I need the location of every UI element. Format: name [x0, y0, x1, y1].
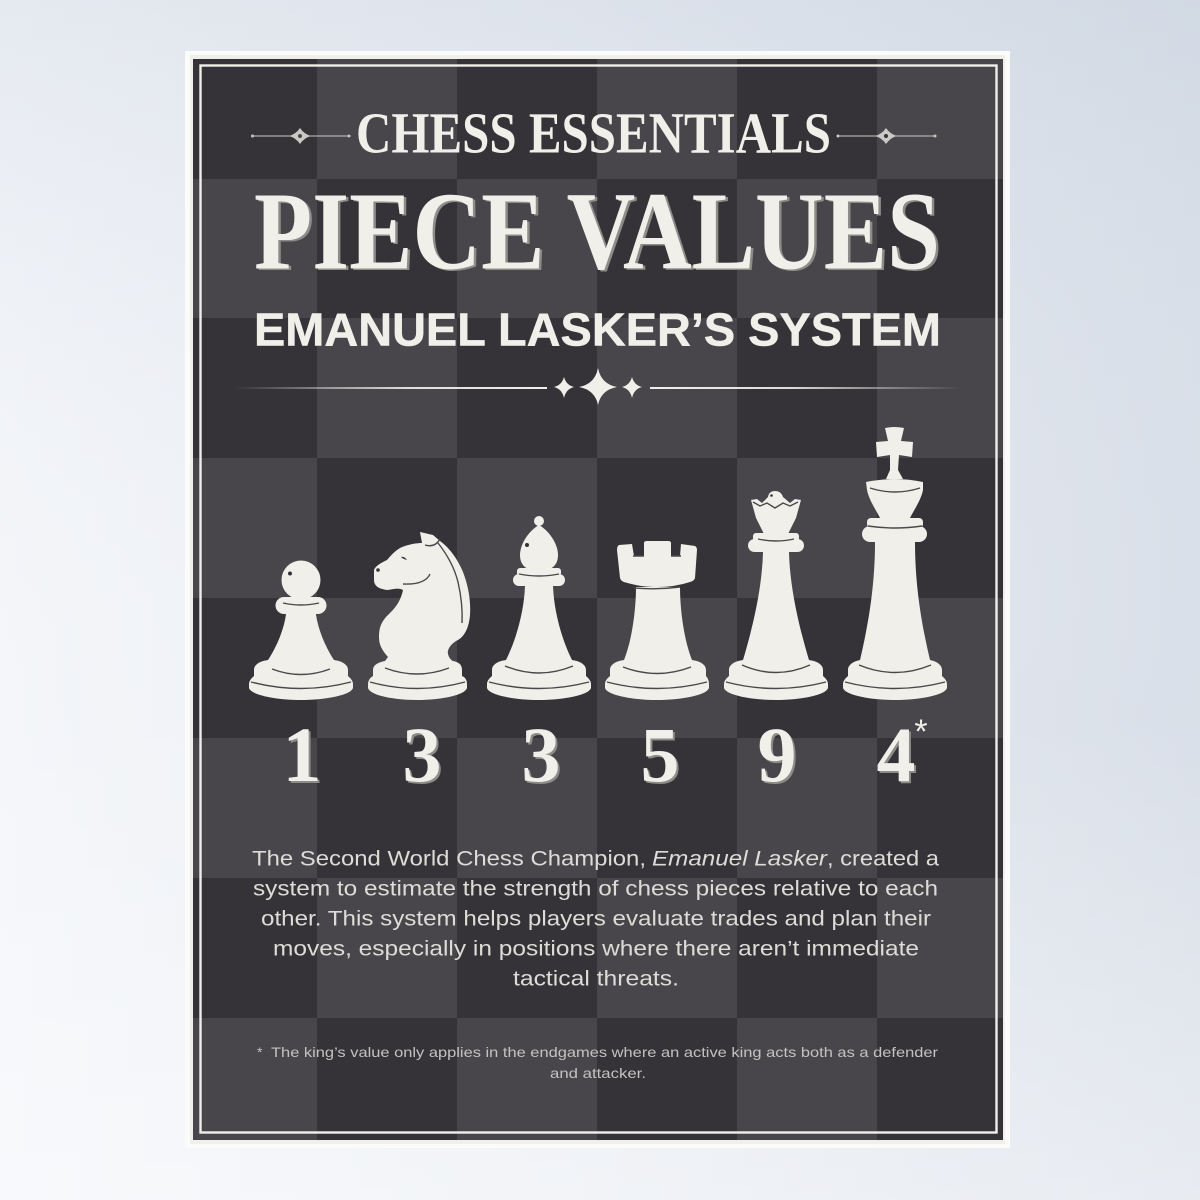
ornament: right of heading: [836, 128, 936, 144]
value: rook 5: 5: [642, 713, 682, 800]
value: queen 9: 9: [758, 711, 796, 798]
chess pieces: [249, 427, 947, 700]
subtitle: EMANUEL LASKER’S SYSTEM: [254, 304, 941, 356]
value: knight 3: 3: [404, 713, 444, 800]
piece: king: [843, 427, 947, 700]
footnote: The king’s value only applies in the endgames where an active king acts both as a defender: [271, 1044, 938, 1060]
value: bishop 3: 3: [524, 713, 562, 800]
description text: moves, especially in positions where there aren’t immediate: [273, 938, 919, 960]
piece: knight: [368, 532, 470, 700]
value: bishop 3: 3: [522, 711, 560, 798]
asterisk: *: [914, 713, 928, 751]
description text: tactical threats.: [513, 968, 679, 990]
divider with sparkles: [235, 368, 962, 405]
value: queen 9: 9: [760, 713, 798, 800]
piece: queen: [724, 491, 828, 700]
value: king 4: 4: [878, 713, 918, 800]
ornament: left of heading: [251, 128, 350, 144]
piece: rook: [605, 541, 709, 700]
value: knight 3: 3: [402, 711, 442, 798]
description text: , created a: [827, 848, 939, 870]
description text: [252, 848, 939, 990]
piece: pawn: [249, 560, 353, 700]
title: piece values: PIECE VALUES: [256, 172, 942, 295]
description text: system to estimate the strength of chess pieces relative to each: [253, 878, 938, 900]
footnote: [257, 1044, 938, 1081]
value: pawn 1: 1: [284, 713, 324, 800]
piece: bishop: [487, 516, 591, 700]
value: pawn 1: 1: [282, 711, 322, 798]
value: rook 5: 5: [640, 711, 680, 798]
piece values: [282, 711, 928, 800]
value: king 4: 4: [876, 711, 916, 798]
description text: other. This system helps players evaluate trades and plan their: [261, 908, 931, 930]
heading: chess essentials: CHESS ESSENTIALS: [356, 100, 831, 166]
description text: The Second World Chess Champion,: [252, 848, 646, 870]
inner frame line: [200, 66, 996, 1132]
title: piece values: PIECE VALUES: [254, 170, 940, 294]
footnote: *: [257, 1044, 263, 1060]
poster paper edge: [185, 51, 1010, 1148]
description text: Emanuel Lasker: [652, 848, 828, 870]
footnote: and attacker.: [550, 1065, 646, 1081]
checkerboard background: [193, 59, 1003, 1140]
poster: [185, 51, 1010, 1148]
